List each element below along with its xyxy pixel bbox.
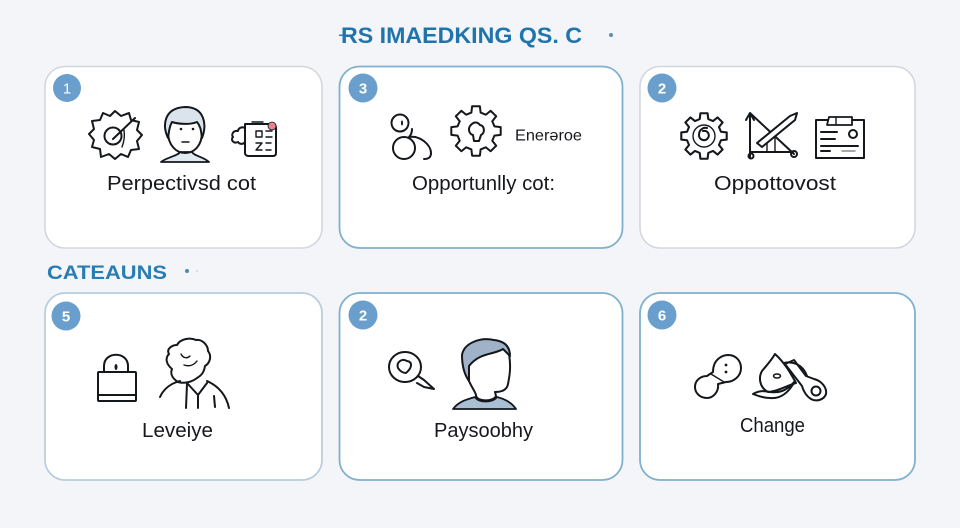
icon: padlock (98, 355, 136, 401)
badge 2 (648, 74, 676, 102)
section heading (47, 263, 198, 284)
icon: gear (451, 106, 501, 156)
label: Oppottovost (714, 173, 836, 195)
icon: spiky gear with needle (89, 111, 142, 159)
title: RS IMAEDKING QS. C (341, 23, 582, 48)
badge 5 (648, 300, 676, 330)
badge 3 (348, 74, 378, 102)
badge 2 (348, 300, 378, 330)
badge 5 (52, 302, 80, 330)
panel: card 4 (45, 293, 322, 480)
badge 1: 1 (63, 80, 71, 98)
icon: document with cloud and red dot (232, 122, 276, 156)
panel: card 5 (340, 293, 622, 480)
badge 2: 2 (658, 80, 666, 98)
label: Paysoobhy (434, 420, 533, 442)
icon label: Enerəroe (515, 128, 582, 144)
label: Leveiye (142, 420, 213, 442)
panel: card 2 (340, 66, 622, 248)
badge 3: 3 (359, 80, 367, 98)
icon: speech bubble with tail (389, 352, 434, 389)
icon: person with light hair (161, 107, 209, 162)
label: Opportunlly cot: (412, 173, 555, 195)
badge 2: 2 (359, 308, 367, 324)
icon: gear with spiral (681, 113, 727, 159)
panel: card 3 (640, 66, 915, 248)
label: Change (740, 415, 805, 437)
badge 1 (53, 74, 81, 102)
panel: card 6 (640, 293, 915, 480)
icon: joined circles (695, 355, 741, 398)
section heading: CATEAUNS (47, 263, 167, 284)
icon: droplet blade and wrench (753, 354, 826, 400)
badge 5: 6 (658, 308, 666, 324)
badge 5: 5 (62, 308, 70, 326)
label: Perpectivsd cot (107, 173, 256, 195)
panel: card 1 (45, 66, 322, 248)
icon: ruler triangle and pencil (746, 113, 797, 158)
icon: clipboard (816, 117, 864, 158)
icon: figure of circles (392, 114, 431, 159)
icon: person with grey hair (453, 339, 516, 409)
icon: curly-haired person (160, 339, 229, 408)
